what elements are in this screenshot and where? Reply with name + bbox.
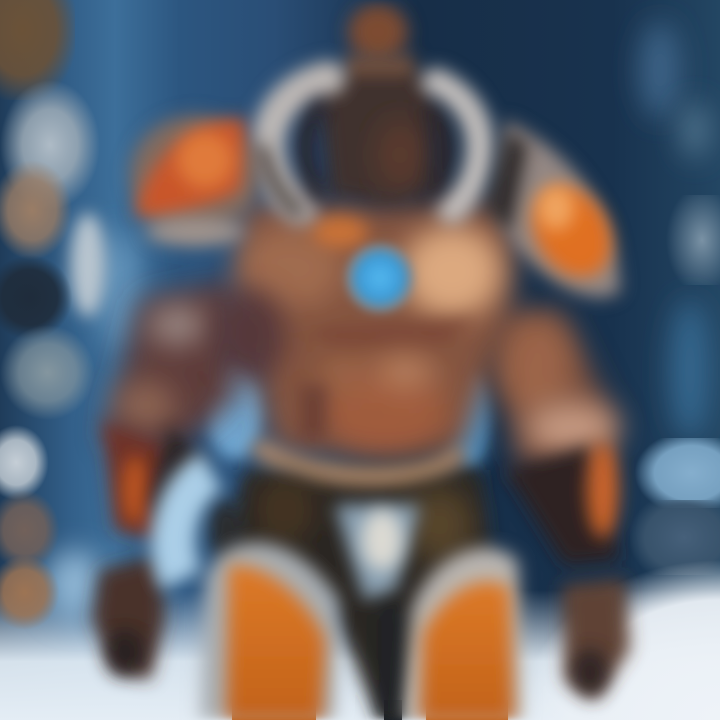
left leg — [200, 543, 338, 720]
left shoulder pad — [130, 115, 260, 246]
torso — [214, 75, 515, 454]
fur collar — [262, 78, 480, 212]
bottom edge colour under the figure — [232, 700, 508, 720]
left curved tusk — [173, 472, 242, 580]
left arm — [92, 280, 235, 680]
chest gem — [346, 244, 414, 312]
snow ground — [0, 550, 720, 720]
head — [345, 4, 415, 100]
figure: warrior — [92, 4, 630, 720]
right leg — [405, 548, 522, 720]
right arm — [490, 310, 630, 700]
right shoulder pad — [488, 120, 627, 298]
belt and loincloth — [225, 445, 490, 720]
tree trunk at left — [0, 0, 106, 630]
